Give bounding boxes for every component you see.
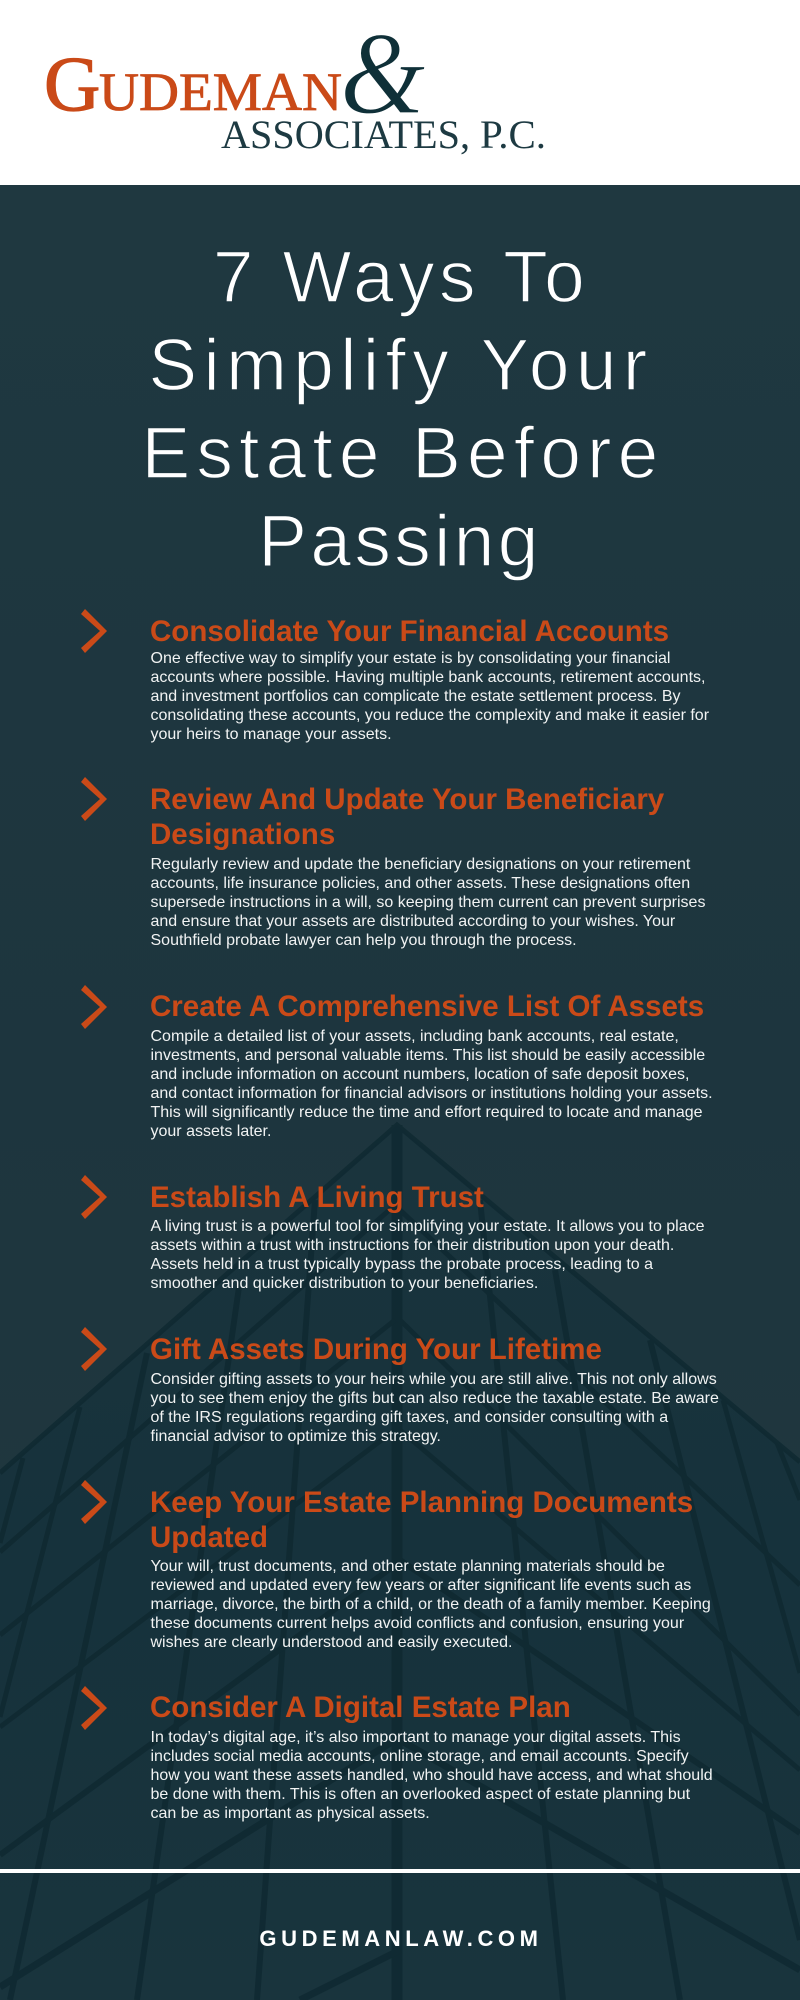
body text: consolidating these accounts, you reduce the complexity and make it easier for xyxy=(150,707,709,724)
item 4: living trust xyxy=(81,1175,705,1292)
body text: smoother and quicker distribution to your beneficiaries. xyxy=(150,1275,538,1292)
body text: your assets later. xyxy=(150,1123,271,1140)
body text: Assets held in a trust typically bypass the probate process, leading to a xyxy=(150,1256,653,1273)
body text: accounts where possible. Having multiple bank accounts, retirement accounts, xyxy=(150,669,705,686)
heading: Keep Your Estate Planning Documents xyxy=(150,1486,693,1519)
logo: Gudeman & Associates, P.C.: G xyxy=(44,40,100,127)
body text: and contact information for financial advisors or institutions holding your assets. xyxy=(150,1085,713,1102)
body text: A living trust is a powerful tool for simplifying your estate. It allows you to place xyxy=(150,1218,705,1235)
heading: Consider A Digital Estate Plan xyxy=(150,1691,571,1724)
body text: Consider gifting assets to your heirs while you are still alive. This not only allows xyxy=(150,1371,717,1388)
body text: In today’s digital age, it’s also important to manage your digital assets. This xyxy=(150,1729,681,1746)
title: Passing xyxy=(258,501,542,582)
body text: reviewed and updated every few years or after significant life events such as xyxy=(150,1577,691,1594)
item 1: consolidate accounts xyxy=(81,609,709,743)
body text xyxy=(150,1558,711,1651)
icon: chevron xyxy=(81,985,107,1029)
title: 7 Ways To xyxy=(213,237,589,318)
body text: how you want these assets handled, who should have access, and what should xyxy=(150,1767,713,1784)
icon: chevron xyxy=(81,1686,107,1730)
logo: Gudeman & Associates, P.C.: UDEMAN xyxy=(99,62,342,122)
logo: Gudeman & Associates, P.C.: & xyxy=(340,7,426,139)
body text: and investment portfolios can complicate the estate settlement process. By xyxy=(150,688,681,705)
body text xyxy=(150,1729,713,1822)
logo: Gudeman & Associates, P.C. xyxy=(44,7,546,157)
logo: Gudeman & Associates, P.C.: ASSOCIATES, xyxy=(221,112,470,157)
footer: website: GUDEMANLAW.COM xyxy=(259,1926,543,1951)
title: Simplify Your xyxy=(148,325,654,406)
title xyxy=(142,237,664,582)
body text: and ensure that your assets are distributed according to your wishes. Your xyxy=(150,913,675,930)
body text: wishes are clearly understood and easily executed. xyxy=(150,1634,512,1651)
body text: Compile a detailed list of your assets, including bank accounts, real estate, xyxy=(150,1028,679,1045)
body text: financial advisor to optimize this strategy. xyxy=(150,1428,441,1445)
heading: Review And Update Your Beneficiary xyxy=(150,783,664,816)
body text xyxy=(150,1218,705,1292)
body text: marriage, divorce, the birth of a child, or the death of a family member. Keeping xyxy=(150,1596,711,1613)
icon: chevron xyxy=(81,1175,107,1219)
body text: these documents current helps avoid conflicts and confusion, ensuring your xyxy=(150,1615,684,1632)
body text: supersede instructions in a will, so keeping them current can prevent surprises xyxy=(150,894,705,911)
body text: Southfield probate lawyer can help you through the process. xyxy=(150,932,577,949)
body text xyxy=(150,1371,719,1445)
heading: Create A Comprehensive List Of Assets xyxy=(150,990,704,1023)
body text: This will significantly reduce the time and effort required to locate and manage xyxy=(150,1104,703,1121)
body text: assets within a trust with instructions for their distribution upon your death. xyxy=(150,1237,674,1254)
body text: accounts, life insurance policies, and other assets. These designations often xyxy=(150,875,690,892)
body text xyxy=(150,1028,713,1140)
body text: investments, and personal valuable items. This list should be easily accessible xyxy=(150,1047,705,1064)
heading xyxy=(150,783,664,851)
body text: Regularly review and update the beneficiary designations on your retirement xyxy=(150,856,690,873)
heading xyxy=(150,1486,693,1554)
logo: Gudeman & Associates, P.C.: P.C. xyxy=(480,112,546,157)
body text: Your will, trust documents, and other estate planning materials should be xyxy=(150,1558,665,1575)
item 6: keep documents updated xyxy=(81,1480,711,1651)
heading: Updated xyxy=(150,1521,268,1554)
icon: chevron xyxy=(81,1480,107,1524)
body text: you to see them enjoy the gifts but can also reduce the taxable estate. Be aware xyxy=(150,1390,719,1407)
heading: Designations xyxy=(150,818,335,851)
body text: can be as important as physical assets. xyxy=(150,1805,430,1822)
body text: of the IRS regulations regarding gift taxes, and consider consulting with a xyxy=(150,1409,668,1426)
icon: chevron xyxy=(81,777,107,821)
body text: One effective way to simplify your estate is by consolidating your financial xyxy=(150,650,670,667)
body text: your heirs to manage your assets. xyxy=(150,726,392,743)
heading: Establish A Living Trust xyxy=(150,1181,484,1214)
body text: includes social media accounts, online storage, and email accounts. Specify xyxy=(150,1748,689,1765)
item 5: gift assets xyxy=(81,1327,719,1445)
heading: Gift Assets During Your Lifetime xyxy=(150,1333,602,1366)
icon: chevron xyxy=(81,1327,107,1371)
icon: chevron xyxy=(81,609,107,653)
item 7: digital estate plan xyxy=(81,1686,713,1822)
item 2: beneficiary designations xyxy=(81,777,705,949)
body text: be done with them. This is often an overlooked aspect of estate planning but xyxy=(150,1786,690,1803)
title: Estate Before xyxy=(142,413,664,494)
heading: Consolidate Your Financial Accounts xyxy=(150,615,669,648)
body text: and include information on account numbers, location of safe deposit boxes, xyxy=(150,1066,690,1083)
body text xyxy=(150,650,709,743)
body text xyxy=(150,856,705,949)
item 3: list of assets xyxy=(81,985,713,1140)
